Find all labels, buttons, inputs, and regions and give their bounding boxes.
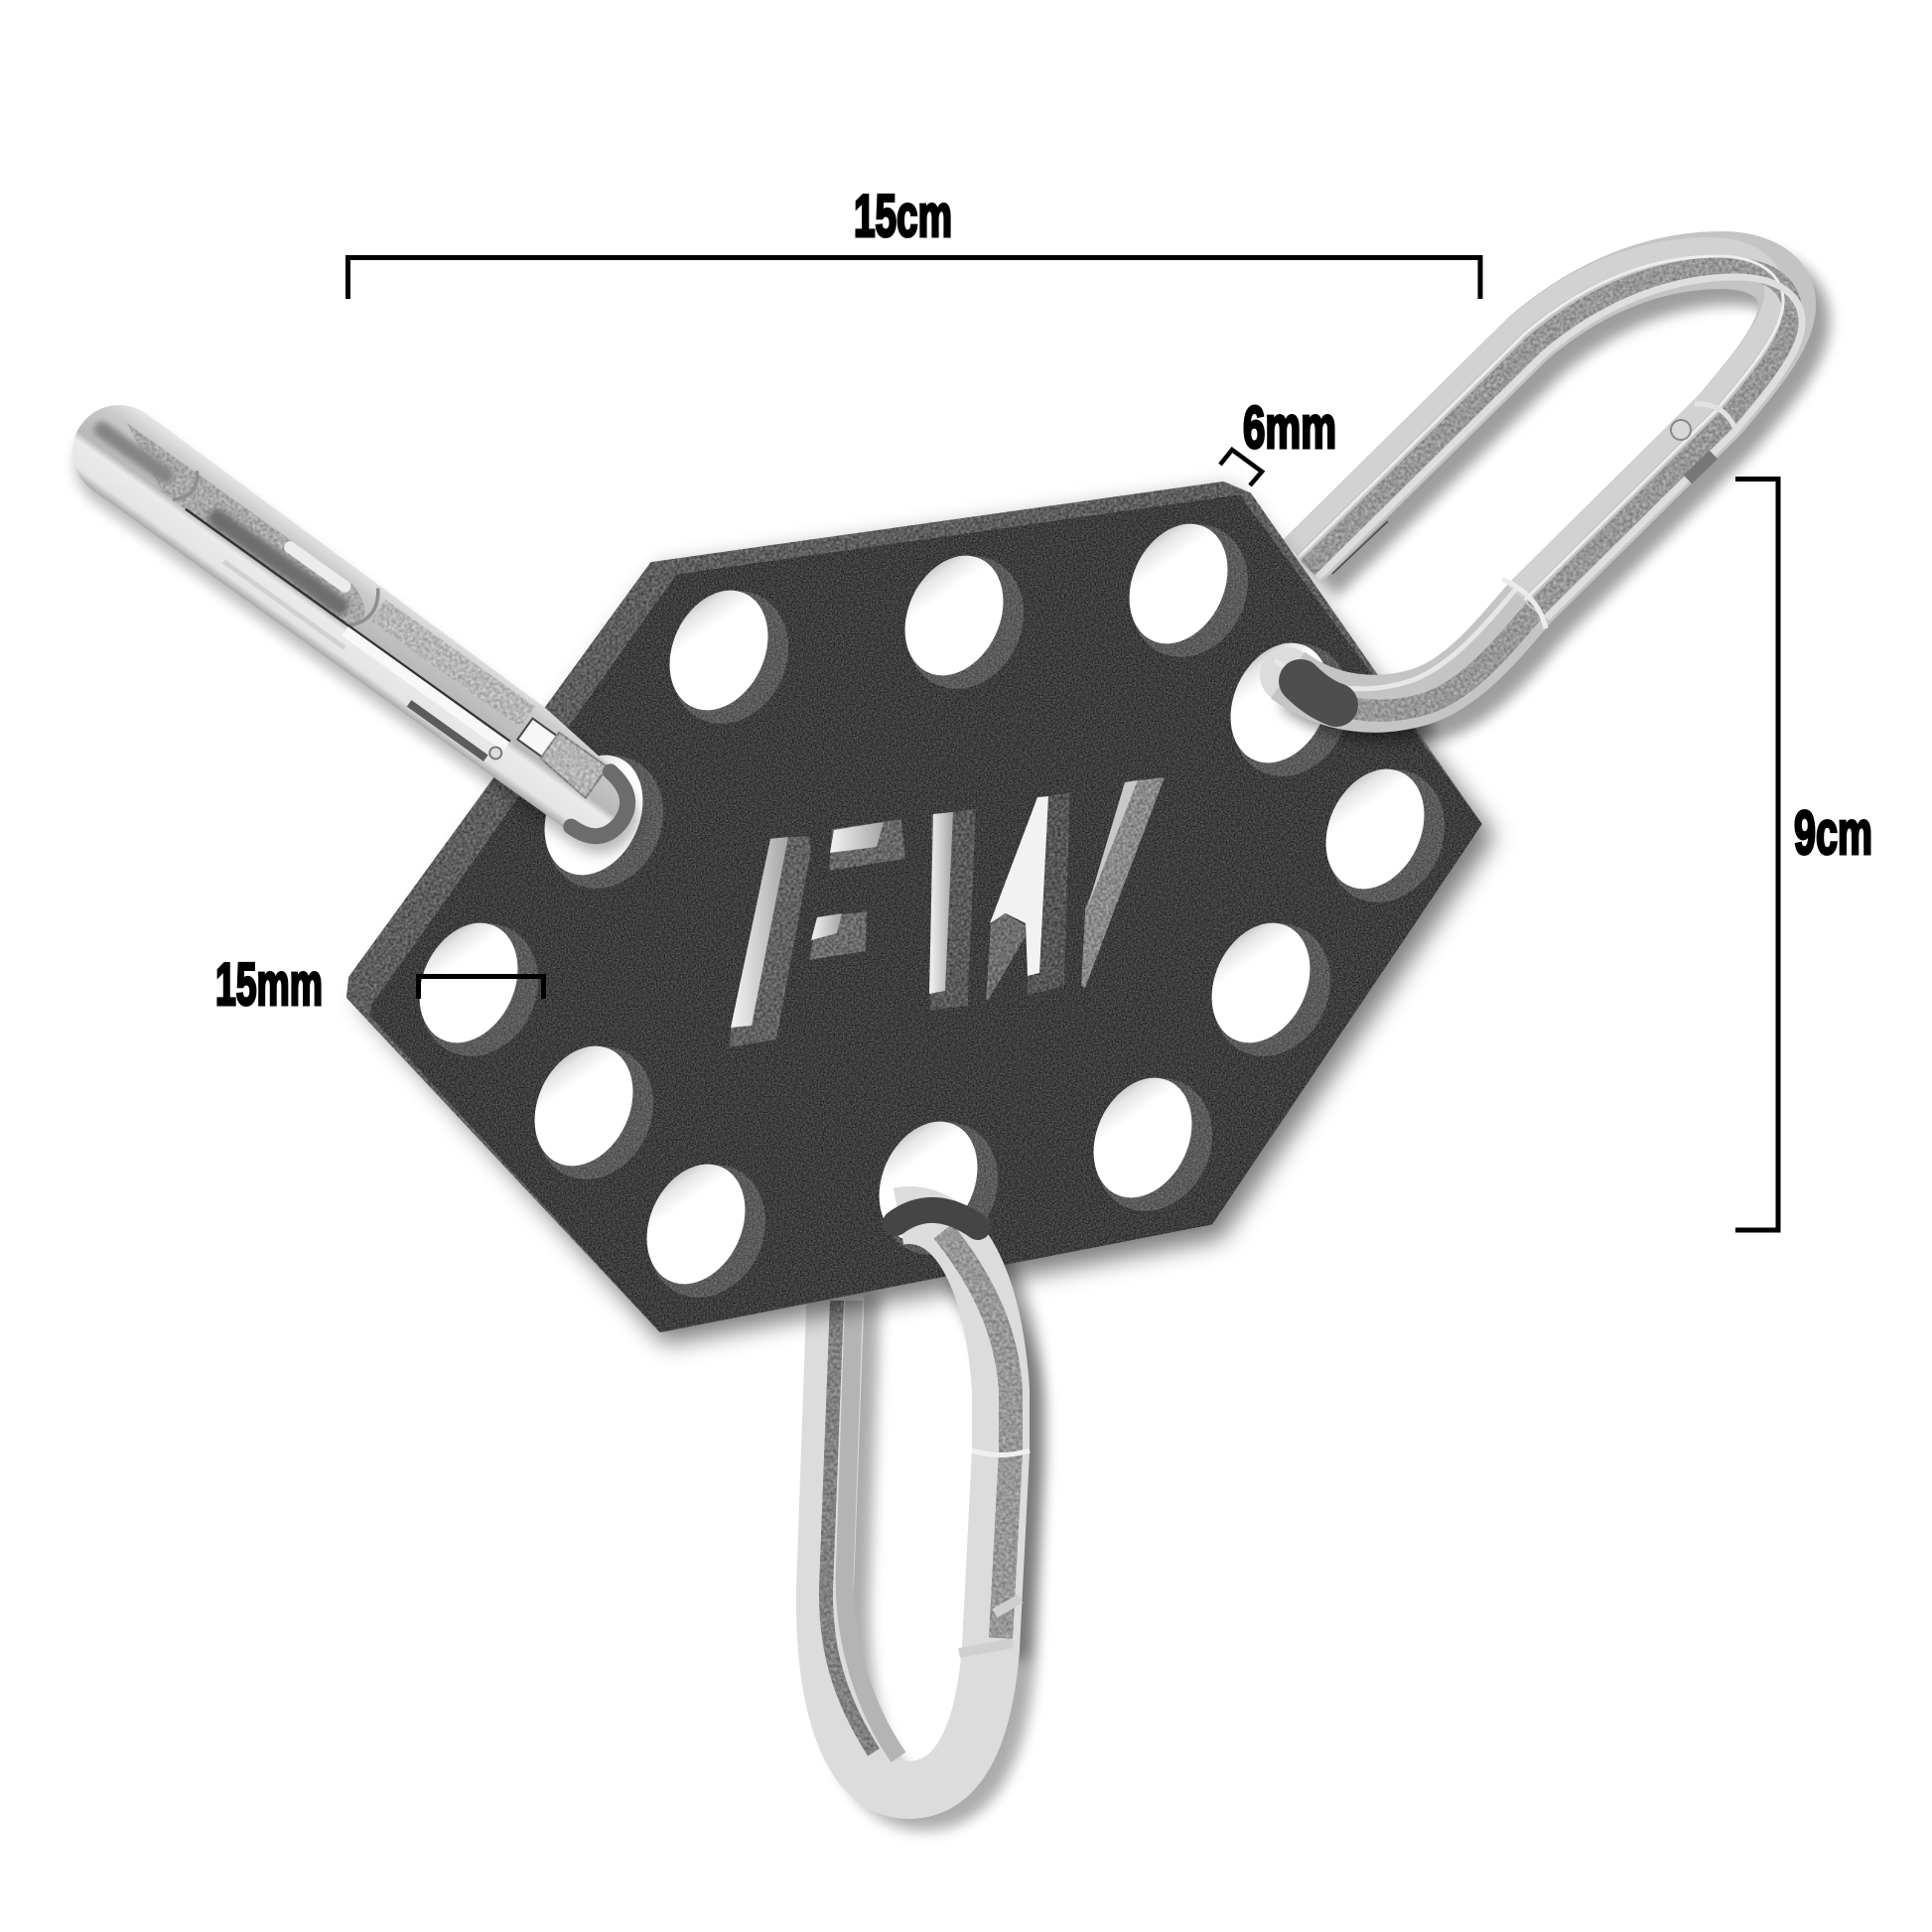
label 6mm: 6mm xyxy=(1243,394,1336,461)
gate detail xyxy=(959,1598,1021,1653)
gate clip xyxy=(1688,455,1714,480)
hole 3 xyxy=(1109,504,1270,677)
hole 6 xyxy=(1191,903,1352,1076)
label 9cm: 9cm xyxy=(1794,799,1872,868)
rear carabiner: bottom xyxy=(825,1215,1017,1802)
hole 9 xyxy=(626,1145,787,1317)
label 15cm: 15cm xyxy=(854,183,952,249)
bracket line xyxy=(1220,450,1262,485)
white gate strip xyxy=(342,626,509,752)
FW logo cut-out xyxy=(730,777,1165,1047)
letter F middle bar xyxy=(809,911,867,960)
hole 1 xyxy=(649,571,810,744)
bracket line xyxy=(419,977,544,999)
light tip inside hole xyxy=(1260,647,1315,703)
letter F top bar xyxy=(829,819,905,871)
front arm: right carabiner xyxy=(1260,579,1546,716)
letter W first stroke xyxy=(929,809,976,1011)
panel: hexagon plate xyxy=(349,484,1495,1344)
lower collar xyxy=(1502,579,1546,628)
plate side edge xyxy=(349,484,1478,1329)
gate pin xyxy=(1671,420,1691,440)
hook tip xyxy=(571,771,641,849)
hole 11 xyxy=(399,903,560,1076)
collar xyxy=(972,1450,1030,1455)
inner edge line xyxy=(1332,521,1388,574)
hole diameter dimension: 15mm xyxy=(215,951,544,1018)
hole 10 xyxy=(514,1027,675,1199)
hole 12 xyxy=(524,736,685,908)
rivet xyxy=(487,745,504,761)
letter W last stroke xyxy=(1081,777,1165,988)
hole 7 xyxy=(1073,1058,1234,1231)
bracket line xyxy=(347,258,1480,299)
rear carabiner: right xyxy=(1275,247,1802,721)
dark gate line xyxy=(186,509,510,742)
hole 2 xyxy=(885,536,1045,709)
gate collars xyxy=(173,461,385,632)
plate front face xyxy=(371,496,1480,1330)
hole 4 xyxy=(1210,623,1371,796)
carabiner shadow xyxy=(58,399,663,869)
dark section entering the hole xyxy=(1301,681,1336,705)
hole 5 xyxy=(1306,750,1466,922)
plate shadow xyxy=(359,490,1495,1344)
top dimension bracket: 15cm xyxy=(347,183,1480,299)
letter W middle stroke xyxy=(986,792,1070,1001)
hole 8 xyxy=(859,1102,1020,1275)
carabiner body xyxy=(54,386,659,857)
thickness dimension: 6mm xyxy=(1220,394,1336,485)
gate sleeve xyxy=(517,719,557,757)
bracket line xyxy=(1735,479,1778,1230)
chrome reflection xyxy=(407,700,488,761)
right dimension bracket: 9cm xyxy=(1735,479,1872,1230)
letter F stem xyxy=(730,836,811,1047)
front carabiner: left xyxy=(50,386,667,869)
dark section entering the hole xyxy=(896,1210,978,1227)
label 15mm: 15mm xyxy=(215,951,323,1018)
front arm: bottom carabiner xyxy=(896,1210,1030,1790)
textured inner tube xyxy=(106,423,375,629)
gate collar xyxy=(1695,404,1734,427)
